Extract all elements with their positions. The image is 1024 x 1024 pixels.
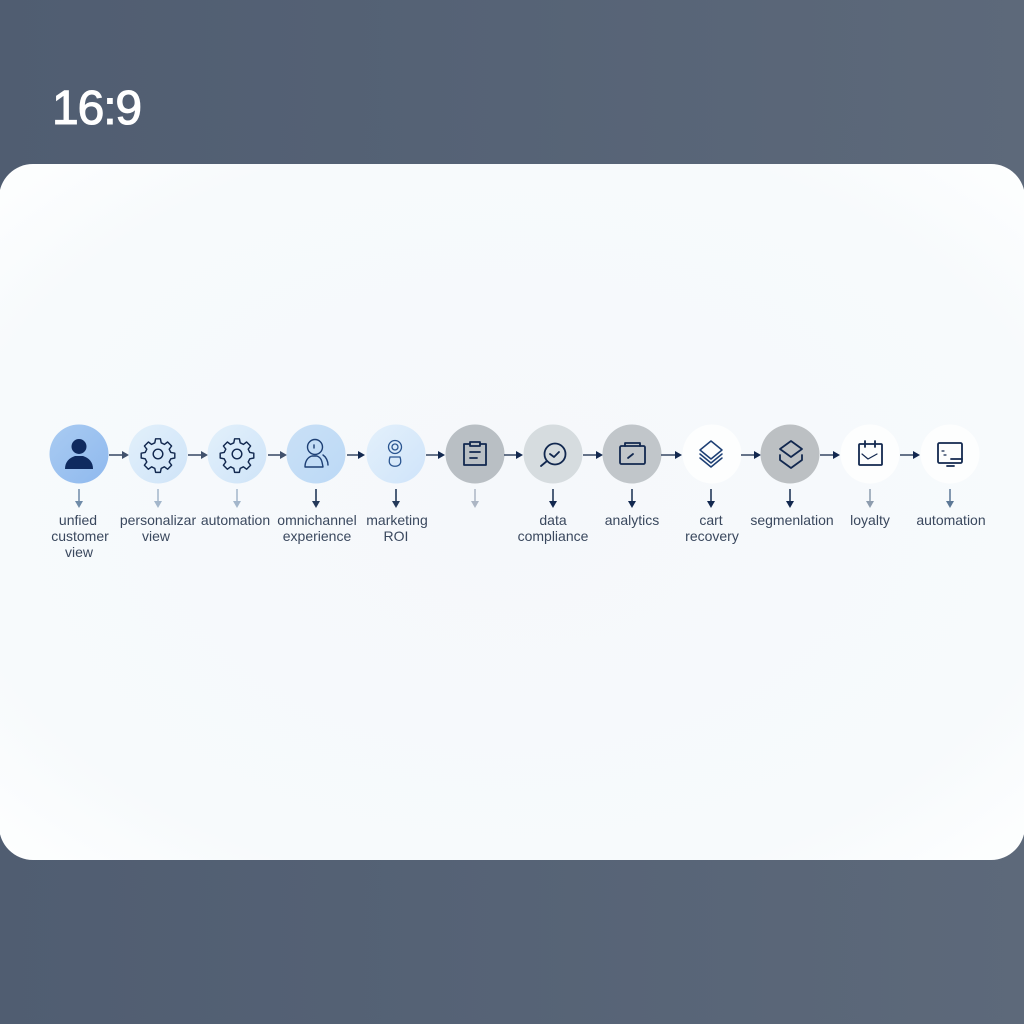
icon: monitor (938, 443, 962, 466)
step 9: cart recovery: cart (699, 512, 723, 528)
step 11: loyalty: loyalty (850, 512, 890, 528)
step 12: automation: automation (916, 512, 986, 528)
step 12: automation (916, 424, 986, 528)
step 7: data compliance: compliance (518, 528, 589, 544)
icon: clipboard (464, 442, 486, 465)
icon: coin stack (388, 440, 402, 466)
aspect ratio label: 16:9 (52, 82, 141, 135)
step 5: marketing ROI (366, 424, 428, 544)
step 7: data compliance (518, 424, 589, 544)
step 4: omnichannel experience (277, 424, 357, 544)
icon: gear (141, 439, 175, 472)
icon: magnifier check (541, 444, 566, 466)
icon: cube (780, 441, 802, 468)
arrow 3 to 4 (268, 451, 287, 459)
arrow 2 to 3 (188, 451, 208, 459)
arrow 6 to 7 (504, 451, 523, 459)
step 1: unified customer view: customer (51, 528, 109, 544)
arrow 4 to 5 (347, 451, 365, 459)
icon: briefcase (620, 443, 645, 464)
icon: person outline (305, 440, 328, 467)
step 11: loyalty (840, 424, 900, 528)
step 8: analytics (602, 424, 662, 528)
arrow 10 to 11 (820, 451, 840, 459)
step 4: omnichannel experience: omnichannel (277, 512, 357, 528)
step 3: automation: automation (201, 512, 270, 528)
arrow 8 to 9 (661, 451, 682, 459)
main white panel (0, 164, 1024, 860)
step 2: personalization view: view (142, 528, 171, 544)
step 8: analytics: analytics (605, 512, 659, 528)
step 9: cart recovery: recovery (685, 528, 739, 544)
step 1: unified customer view (50, 424, 109, 560)
arrow 7 to 8 (583, 451, 603, 459)
step 3: automation (201, 424, 270, 528)
arrow 9 to 10 (741, 451, 761, 459)
step 1: unified customer view: view (65, 544, 94, 560)
arrow 5 to 6 (426, 451, 445, 459)
icon: gear (220, 439, 254, 472)
step 10: segmentation (750, 424, 834, 528)
arrow 1 to 2 (109, 451, 129, 459)
step 2: personalization view: personalizar (120, 512, 196, 528)
step 5: marketing ROI: ROI (384, 528, 408, 544)
step 4: omnichannel experience: experience (283, 528, 351, 544)
step 6: unlabelled clipboard (446, 424, 504, 508)
step 9: cart recovery (682, 424, 742, 544)
step 5: marketing ROI: marketing (366, 512, 428, 528)
process flow (50, 424, 986, 560)
step 2: personalization view (120, 424, 196, 544)
icon: person (65, 439, 93, 469)
arrow 11 to 12 (900, 451, 920, 459)
step 1: unified customer view: unfied (59, 512, 97, 528)
step 10: segmentation: segmenlation (750, 512, 834, 528)
icon: calendar (859, 441, 882, 465)
icon: layers (700, 441, 722, 467)
step 7: data compliance: data (539, 512, 567, 528)
